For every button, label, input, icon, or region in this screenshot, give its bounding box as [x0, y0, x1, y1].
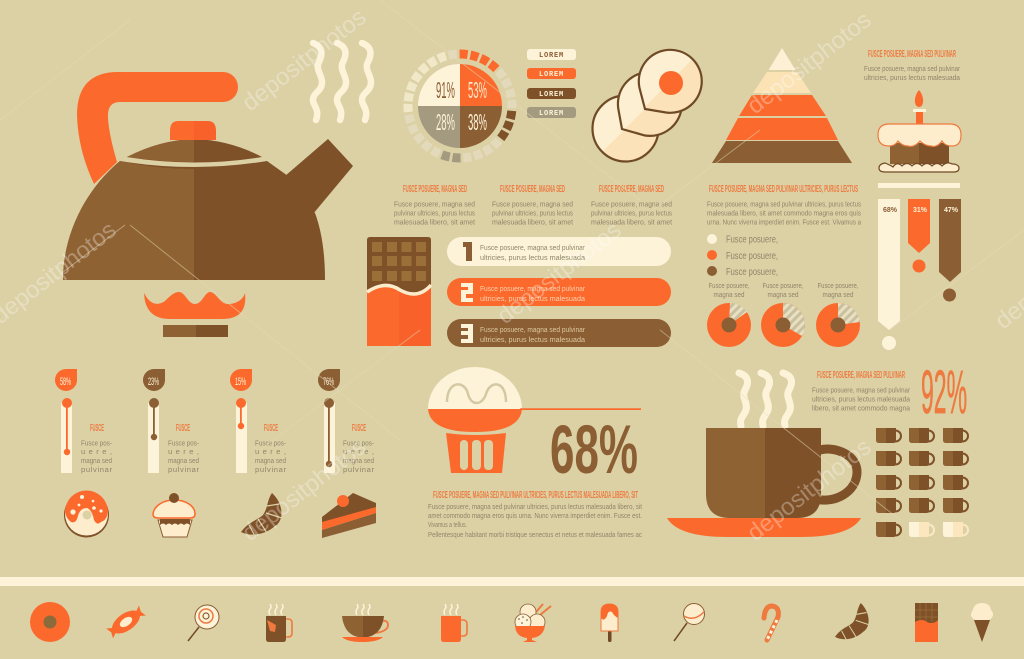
- text block: below muffin: [428, 490, 643, 539]
- donut chart: 28%: [436, 109, 455, 135]
- pie: small 2: magna sed: [768, 290, 798, 299]
- legend: dots: Fusce posuere,: [726, 250, 778, 262]
- text block: top right: [864, 49, 961, 82]
- text column 1: [394, 184, 476, 226]
- step 2 pill: ultricies, purus lectus malesuada: [480, 294, 586, 303]
- donut chart: 38%: [468, 109, 487, 135]
- text column 3: malesuada libero, sit amet: [591, 218, 673, 226]
- arrow bars: 68%: [883, 207, 898, 214]
- step 3 pill: Fusce posuere, magna sed pulvinar: [480, 325, 585, 334]
- icon: chocolate bar: [367, 237, 431, 346]
- text block: right of columns: [707, 184, 862, 226]
- thermometer 4: magna sed: [343, 456, 374, 465]
- text block: coffee: Fusce posuere, magna sed pulvinar: [812, 386, 910, 394]
- pie: small 2: Fusce posuere,: [762, 281, 804, 290]
- text: depositphotos: [237, 3, 371, 117]
- text column 1: pulvinar ultricies, purus lectus: [394, 208, 475, 218]
- text block: coffee: ultricies, purus lectus malesuada: [812, 394, 911, 404]
- text: FUSCE POSUERE, MAGNA SED PULVINAR: [817, 370, 905, 381]
- text block: right of columns: Fusce posuere, magna sed pulvinar ultricies, purus lectus: [707, 200, 861, 208]
- arrow bars: 31%: [913, 207, 928, 214]
- thermometer 3: 15%: [235, 376, 246, 388]
- text: FUSCE POSUERE, MAGNA SED PULVINAR ULTRICIES, PURUS LECTUS MALESUADA LIBERO, SIT: [433, 490, 638, 501]
- thermometer 3: Fusce pos-: [255, 438, 286, 448]
- text: FUSCE POSUERE, MAGNA SED: [500, 184, 565, 195]
- thermometer 2: magna sed: [168, 456, 199, 465]
- donut chart: 53%: [468, 77, 487, 103]
- text block: right of columns: urna. Nunc viverra imperdiet enim. Fusce est. Vivamus a: [707, 218, 862, 226]
- legend: dots: [707, 234, 778, 278]
- text: depositphotos: [742, 6, 876, 120]
- thermometer 4: FUSCE: [352, 423, 366, 434]
- arrow bars: 47%: [944, 207, 959, 214]
- text: depositphotos: [742, 433, 876, 547]
- step 1 pill: Fusce posuere, magna sed pulvinar: [480, 243, 585, 252]
- footer icon: round lollipop: [674, 604, 704, 641]
- step 3 pill: [447, 319, 671, 347]
- icon: birthday cake: [878, 90, 961, 172]
- thermometer 1: magna sed: [81, 456, 112, 465]
- thermometer 4: pulvinar: [343, 465, 374, 474]
- text block: coffee: [812, 370, 911, 412]
- kettle lid: [127, 139, 262, 162]
- pictogram: cup grid: [876, 428, 968, 537]
- text block: below muffin: amet commodo magna eros quis urna. Nunc viverra imperdiet enim. Fusce est.: [428, 511, 642, 520]
- arrow bars: [878, 199, 961, 350]
- thermometer 3: uere,: [255, 447, 286, 456]
- thermometer 3: [230, 369, 286, 474]
- pie: small 1: Fusce posuere,: [708, 281, 750, 290]
- big stat: 68%: 68%: [550, 411, 638, 488]
- text block: below muffin: Pellentesque habitant morbi tristique senectus et netus et malesuada fames ac: [428, 530, 642, 539]
- icon: steam above kettle: [313, 43, 371, 120]
- legend: lorem pills: LOREM: [539, 110, 564, 118]
- text: depositphotos: [237, 433, 371, 547]
- donut chart: [408, 54, 512, 158]
- text column 3: pulvinar ultricies, purus lectus: [591, 208, 672, 218]
- thermometer 2: uere,: [168, 447, 199, 456]
- thermometer 1: [55, 369, 112, 474]
- icon: three biscuits: [592, 50, 702, 162]
- icon: pyramid chart: [712, 48, 852, 163]
- legend: lorem pills: LOREM: [539, 52, 564, 60]
- thermometer 2: 23%: [148, 376, 159, 388]
- thermometer 4: uere,: [343, 447, 374, 456]
- text block: top right: Fusce posuere, magna sed pulvinar: [864, 64, 960, 73]
- text block: below muffin: Vivamus a tellus.: [428, 520, 467, 529]
- text column 2: Fusce posuere, magna sed: [492, 200, 573, 208]
- thermometer 3: magna sed: [255, 456, 286, 465]
- legend: lorem pills: LOREM: [539, 71, 564, 79]
- footer icon: donut: [30, 602, 70, 642]
- footer icon: popsicle: [601, 604, 618, 642]
- thermometer 1: 58%: [60, 376, 71, 388]
- thermometer 4: Fusce pos-: [343, 438, 374, 448]
- step 2 pill: [447, 278, 671, 306]
- text column 2: pulvinar ultricies, purus lectus: [492, 208, 573, 218]
- thermometer 1: Fusce pos-: [81, 438, 112, 448]
- footer icon: chocolate bar: [915, 603, 938, 642]
- text block: coffee: libero, sit amet commodo magna: [812, 404, 911, 412]
- thermometer 1: uere,: [81, 447, 112, 456]
- kettle spout: [285, 139, 353, 214]
- footer icon: lollipop: [188, 605, 219, 641]
- footer icon: tea mug: [266, 604, 292, 642]
- step 2 pill: Fusce posuere, magna sed pulvinar: [480, 284, 585, 293]
- pie: small 2: [761, 281, 805, 347]
- pie: small 1: [707, 281, 751, 347]
- icon: croissant: [241, 493, 282, 536]
- step 3 pill: ultricies, purus lectus malesuada: [480, 335, 586, 344]
- kettle handle: [77, 72, 238, 184]
- pie: small 1: magna sed: [714, 290, 744, 299]
- thermometer 2: [143, 369, 199, 474]
- text block: top right: ultricies, purus lectus malesuada: [864, 73, 961, 82]
- step 1 pill: [447, 237, 671, 266]
- kettle knob: [170, 121, 194, 140]
- text: FUSCE POSUERE, MAGNA SED: [403, 184, 467, 195]
- footer icon: ice cream bowl: [515, 604, 551, 642]
- legend: lorem pills: LOREM: [539, 91, 564, 99]
- text column 2: [492, 184, 574, 226]
- kettle body: [63, 161, 325, 280]
- legend: dots: Fusce posuere,: [726, 234, 778, 246]
- thermometer 2: FUSCE: [176, 423, 190, 434]
- icon: kettle: [63, 72, 353, 280]
- icon: donut: [64, 490, 109, 538]
- text column 3: Fusce posuere, magna sed: [591, 200, 672, 208]
- footer icon: candy: [105, 604, 147, 640]
- text column 2: malesuada libero, sit amet: [492, 218, 574, 226]
- text block: right of columns: malesuada libero, sit amet commodo magna eros quis: [707, 208, 861, 218]
- thermometer 2: pulvinar: [168, 465, 199, 474]
- footer icon: ice cream cone: [971, 603, 993, 642]
- footer icon: candy cane: [764, 606, 778, 640]
- step 1 pill: ultricies, purus lectus malesuada: [480, 253, 586, 262]
- text: depositphotos: [492, 216, 626, 330]
- divider bar above arrows: [878, 183, 960, 188]
- donut chart: 91%: [436, 77, 455, 103]
- thermometer 4: 76%: [323, 376, 334, 388]
- pie: small 3: Fusce posuere,: [818, 281, 858, 290]
- footer icon: coffee cup: [342, 604, 388, 642]
- text block: below muffin: Fusce posuere, magna sed pulvinar ultricies, purus lectus malesuada libero, sit: [428, 502, 643, 511]
- icon: cake slice: [322, 493, 376, 538]
- thermometer 1: pulvinar: [81, 465, 112, 474]
- thermometer 2: Fusce pos-: [168, 438, 199, 448]
- text column 1: malesuada libero, sit amet: [394, 218, 476, 226]
- pie: small 3: magna sed: [822, 290, 854, 299]
- footer icon: croissant: [835, 603, 869, 640]
- icon: burner flame: [144, 292, 245, 337]
- legend: lorem pills: [527, 49, 576, 118]
- thermometer 4: [318, 369, 374, 474]
- legend: dots: Fusce posuere,: [726, 266, 778, 278]
- pie: small 3: [816, 281, 860, 347]
- thermometer 3: FUSCE: [264, 423, 278, 434]
- text column 1: Fusce posuere, magna sed: [394, 200, 475, 208]
- icon: cupcake: [153, 493, 195, 537]
- text column 3: [591, 184, 673, 226]
- icon: big coffee cup: [667, 373, 861, 537]
- text: FUSCE POSUERE, MAGNA SED: [599, 184, 664, 195]
- thermometer 1: FUSCE: [90, 423, 104, 434]
- footer icon: orange mug: [441, 604, 467, 642]
- footer divider strip: [0, 577, 1024, 586]
- thermometer 3: pulvinar: [255, 465, 286, 474]
- icon: muffin: [428, 367, 641, 473]
